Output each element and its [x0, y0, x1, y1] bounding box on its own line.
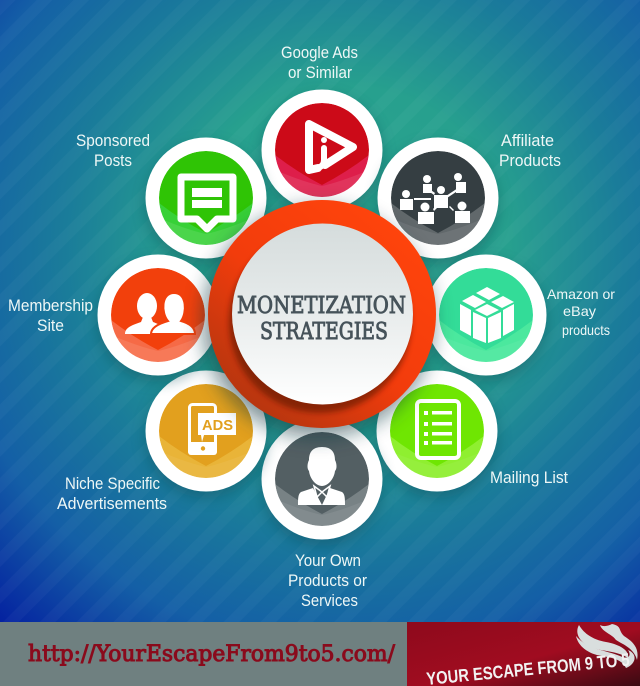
label: Google Ads or Similar: or Similar [288, 64, 352, 82]
panel: Google Ads badge [261, 90, 383, 217]
logo wing icon [576, 624, 638, 668]
label: Membership Site: Membership [8, 297, 93, 315]
label: Affiliate Products: Affiliate [501, 132, 554, 150]
label: Amazon or eBay products: eBay [563, 303, 596, 319]
label: Niche Specific Advertisements [57, 475, 167, 513]
label: Your Own Products or Services [288, 552, 367, 610]
label: Your Own Products or Services: Your Own [295, 552, 361, 570]
footer bar [0, 622, 640, 686]
label: Niche Specific Advertisements: Niche Specific [65, 475, 160, 493]
label: Sponsored Posts: Sponsored [76, 132, 150, 150]
panel: Niche Advertisements badge [145, 370, 267, 498]
icon: play with i [309, 124, 353, 170]
panel: Membership Site badge [97, 254, 219, 382]
label: Amazon or eBay products: Amazon or [547, 286, 615, 302]
title [237, 293, 406, 345]
label: Your Own Products or Services: Services [301, 592, 358, 610]
icon: businessman [298, 447, 345, 505]
footer logo panel [407, 622, 640, 686]
title: MONETIZATION [237, 293, 406, 319]
icon: two people [125, 293, 195, 334]
label: Niche Specific Advertisements: Advertisements [57, 495, 167, 513]
icon: box [460, 287, 514, 343]
icon: people network [400, 173, 470, 224]
label: Google Ads or Similar: Google Ads [281, 44, 358, 62]
panel: Mailing List badge [376, 370, 498, 498]
icon: speech bubble [181, 177, 233, 229]
panel: Sponsored Posts badge [145, 138, 267, 265]
panel: Your Own Products badge [261, 418, 383, 546]
icon: phone with ads: ADS [202, 417, 233, 434]
panel: Affiliate Products badge [377, 138, 499, 265]
label: Sponsored Posts [76, 132, 150, 170]
label: Amazon or eBay products [547, 286, 615, 338]
label: Google Ads or Similar [281, 44, 358, 82]
center ring [203, 200, 436, 437]
icon: list document [417, 401, 459, 458]
label: Amazon or eBay products: products [562, 322, 610, 338]
label: Sponsored Posts: Posts [94, 152, 132, 170]
label: Affiliate Products: Products [499, 152, 561, 170]
label: Affiliate Products [499, 132, 561, 170]
label: Membership Site: Site [37, 317, 64, 335]
title: STRATEGIES [260, 319, 388, 345]
label: Mailing List: Mailing List [490, 469, 568, 487]
center disc [232, 224, 413, 404]
panel: Amazon or eBay badge [425, 254, 547, 382]
label: Membership Site [8, 297, 93, 335]
label: Your Own Products or Services: Products or [288, 572, 367, 590]
footer url: http://YourEscapeFrom9to5.com/ [28, 642, 396, 667]
